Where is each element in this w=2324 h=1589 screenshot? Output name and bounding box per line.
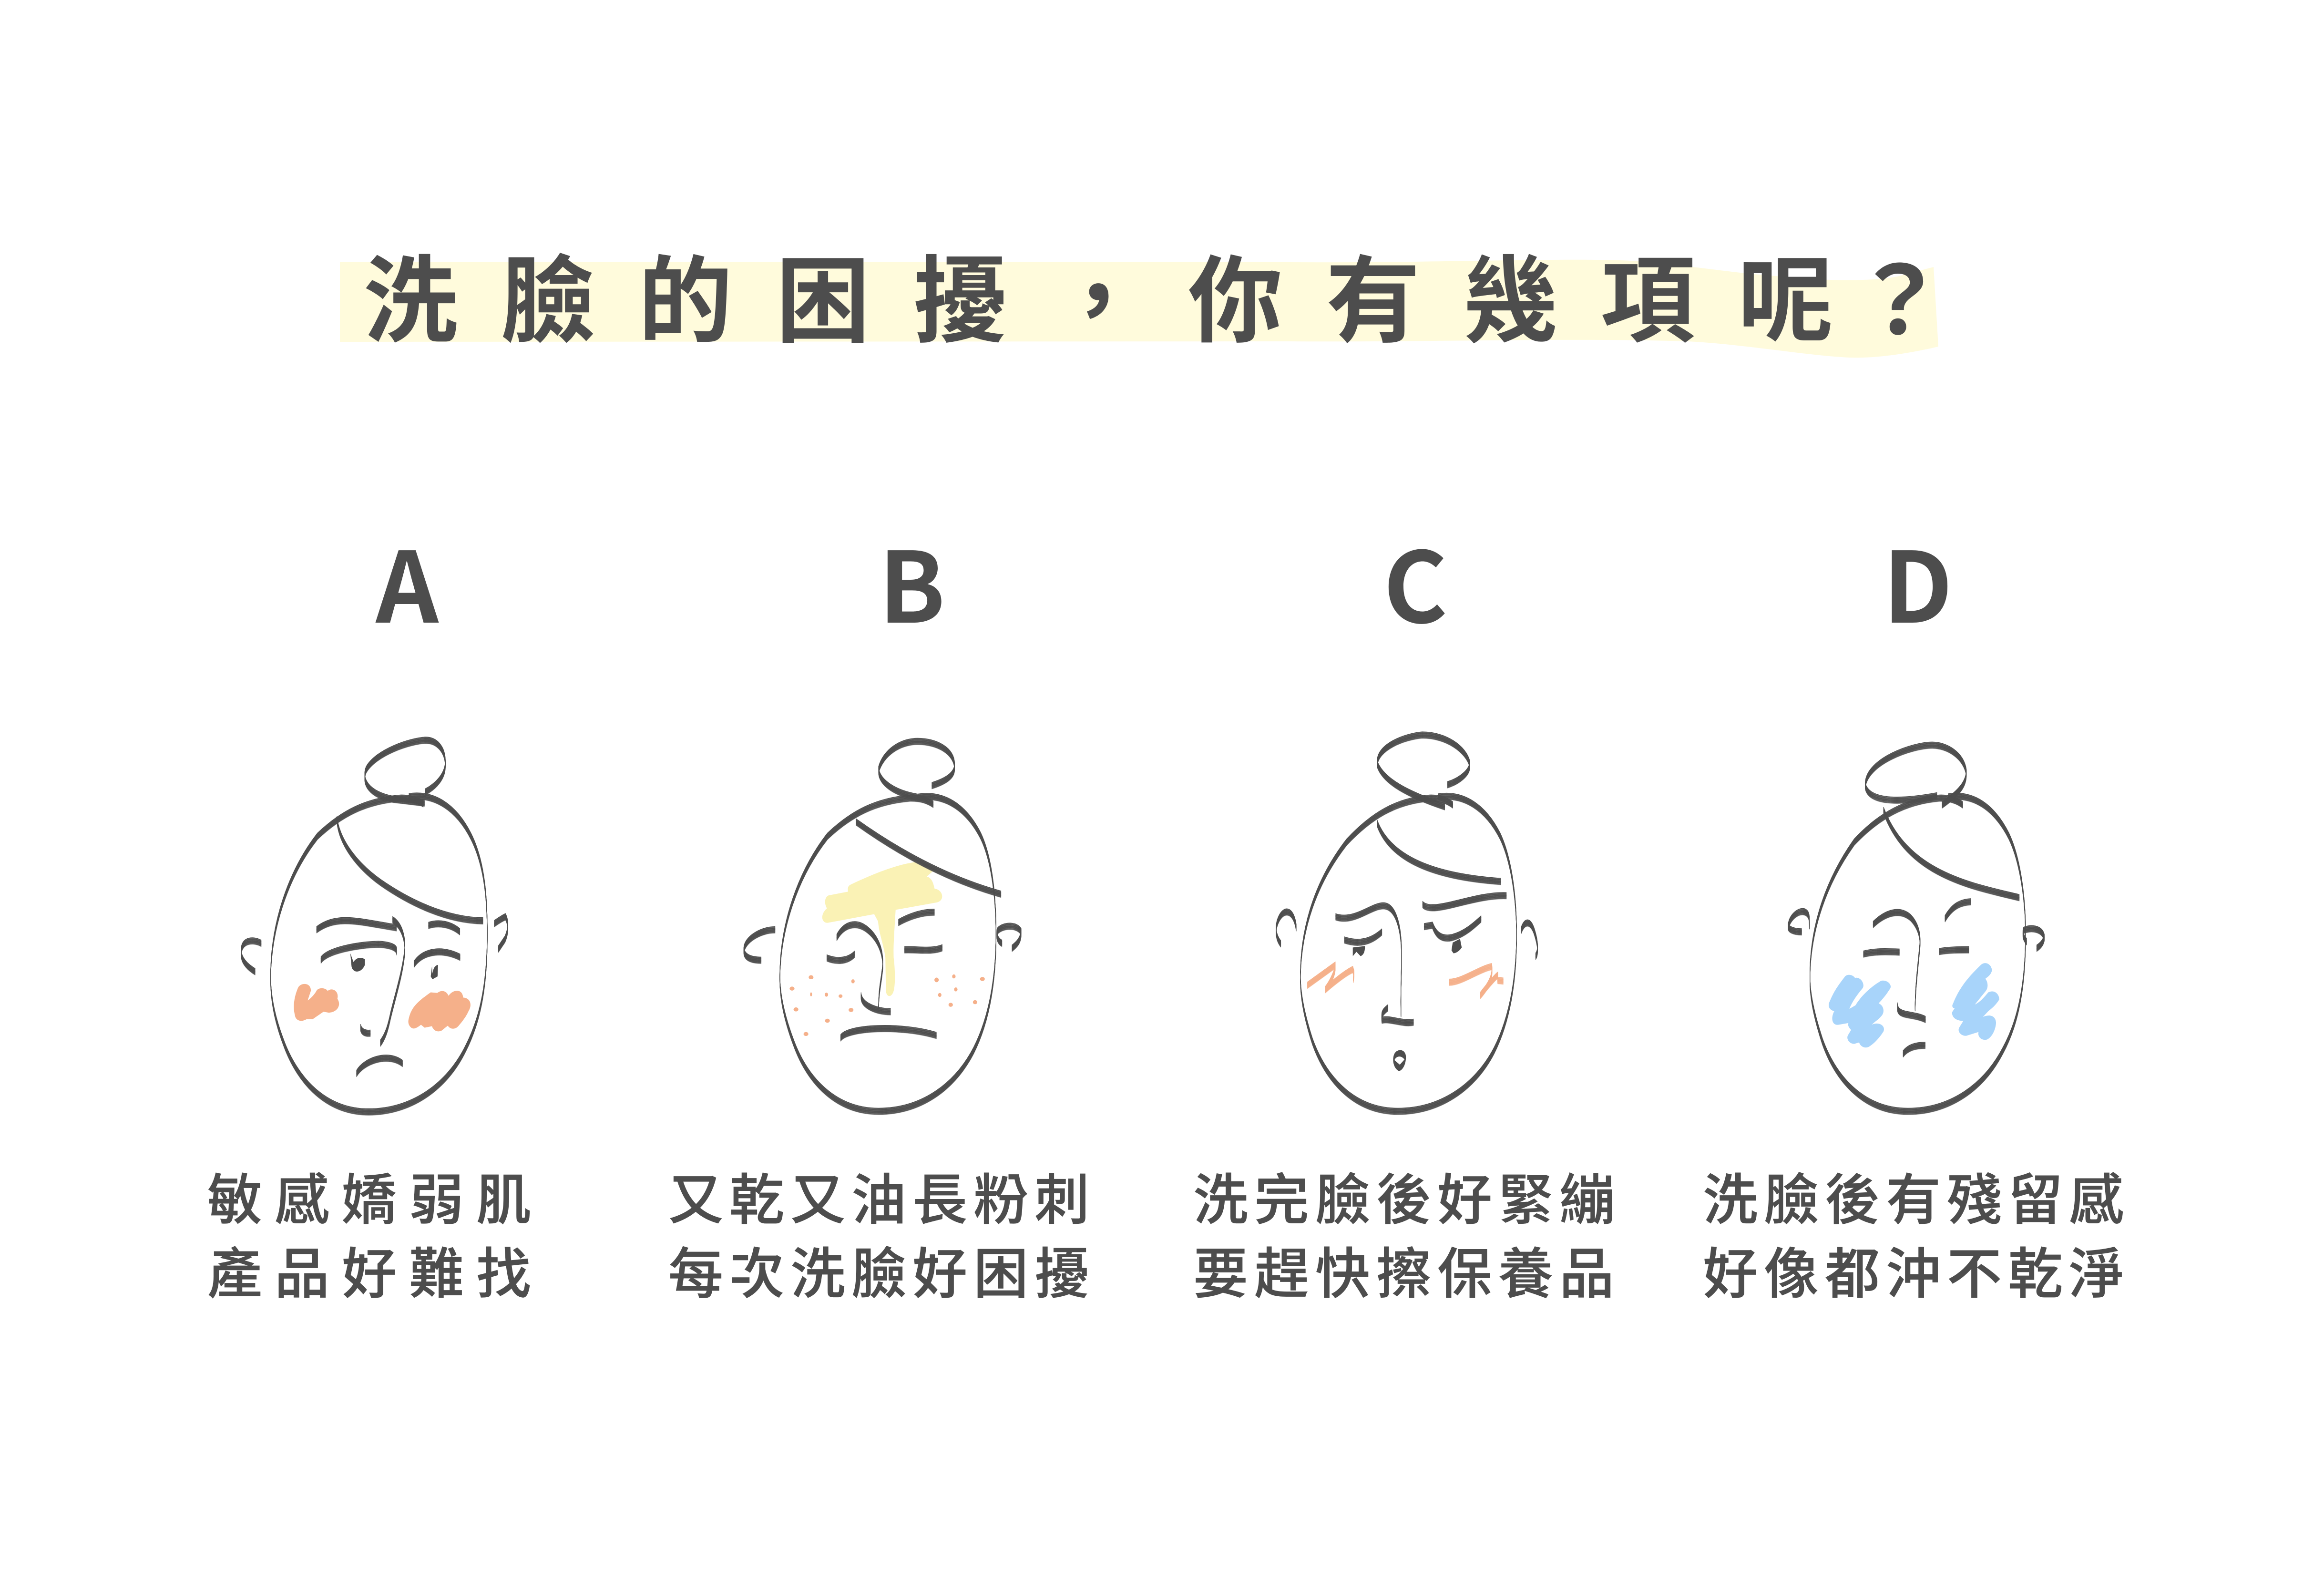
- blush strokes: [1307, 962, 1504, 992]
- line art A: [241, 737, 508, 1109]
- pupils and mouth: [1353, 939, 1462, 1071]
- face B: dry and oily skin: [744, 738, 1021, 1108]
- title: 洗臉的困擾，你有幾項呢？: [363, 225, 1989, 362]
- face D: residue after washing: [1788, 742, 2044, 1108]
- caption A: [207, 1156, 543, 1309]
- caption C: [1193, 1156, 1620, 1309]
- column letter B: B: [879, 510, 945, 651]
- caption B: 又乾又油長粉刺: [668, 1156, 1095, 1235]
- caption B: [668, 1156, 1095, 1309]
- line art D: [1788, 742, 2044, 1108]
- freckles: [789, 974, 985, 1036]
- line art C: [1276, 732, 1537, 1108]
- caption C: 要趕快擦保養品: [1193, 1230, 1620, 1309]
- column letter C: C: [1383, 510, 1447, 651]
- oily T-zone: [822, 862, 942, 996]
- blue residue on cheeks: [1829, 963, 1999, 1047]
- caption D: 好像都沖不乾淨: [1703, 1230, 2130, 1309]
- blush cheeks: [294, 984, 471, 1031]
- column letter D: D: [1883, 510, 1953, 651]
- face C: tight skin after washing: [1276, 732, 1537, 1108]
- caption B: 每次洗臉好困擾: [668, 1230, 1095, 1309]
- line art B: [744, 738, 1021, 1108]
- caption A: 敏感嬌弱肌: [207, 1156, 543, 1235]
- caption D: 洗臉後有殘留感: [1703, 1156, 2130, 1235]
- caption D: [1703, 1156, 2130, 1309]
- caption A: 產品好難找: [207, 1230, 543, 1309]
- title highlight band: [340, 260, 1938, 358]
- face A: sensitive skin: [241, 737, 508, 1109]
- pupils: [350, 953, 438, 979]
- column letter A: A: [375, 510, 439, 651]
- caption C: 洗完臉後好緊繃: [1193, 1156, 1620, 1235]
